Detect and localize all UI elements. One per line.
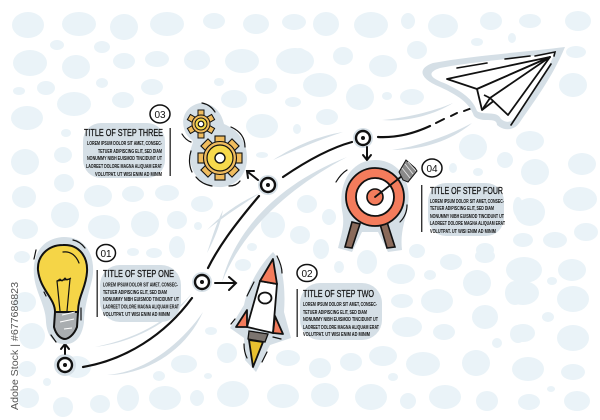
step 3 body: TETUER ADIPISCING ELIT, SED DIAM: [98, 149, 162, 155]
stock image credit: Adobe Stock | #677686823: [9, 282, 21, 410]
step 3 body: LAOREET DOLORE MAGNA ALIQUAM ERAT: [86, 164, 162, 170]
step 1 body: VOLUTPAT. UT WISI ENIM AD MINIM: [103, 312, 170, 318]
step 4 body: LOREM IPSUM DOLOR SIT AMET, CONSEC-: [430, 199, 504, 205]
step 1 body: TETUER ADIPISCING ELIT, SED DIAM: [103, 290, 167, 296]
step 2 text block: [296, 264, 382, 340]
step 3 body: NONUMMY NIBH EUISMOD TINCIDUNT UT: [87, 156, 162, 162]
step 1 body: NONUMMY NIBH EUISMOD TINCIDUNT UT: [103, 297, 179, 303]
step 4 number: 04: [426, 164, 438, 175]
step 2 body: [303, 302, 379, 338]
step 1 text block: [96, 244, 181, 322]
icon: paper plane: [423, 47, 565, 129]
step 1 title: TITLE OF STEP ONE: [103, 268, 174, 280]
arrow: node 2 to rocket: [215, 277, 236, 290]
route node 4: [356, 131, 370, 145]
step 3 title: TITLE OF STEP THREE: [84, 127, 163, 139]
step 2 body: LOREM IPSUM DOLOR SIT AMET, CONSEC-: [303, 302, 377, 308]
route node 1: [58, 358, 72, 372]
step 4 body: [430, 199, 505, 235]
route node 2: [195, 275, 209, 289]
arrow: node 3 to gears: [247, 171, 258, 180]
large gear: [198, 136, 242, 180]
step 2 body: LAOREET DOLORE MAGNA ALIQUAM ERAT: [303, 325, 379, 331]
main route line: [83, 108, 472, 367]
icon: target with arrow: [336, 160, 417, 252]
step 3 text block: [83, 105, 171, 178]
arrow: node 4 to target: [363, 147, 371, 160]
step 3 body: LOREM IPSUM DOLOR SIT AMET, CONSEC-: [87, 141, 162, 147]
step 4 body: LAOREET DOLORE MAGNA ALIQUAM ERAT: [430, 221, 505, 227]
step 3 body: VOLUTPAT. UT WISI ENIM AD MINIM: [95, 172, 162, 178]
icon: rocket: [230, 252, 291, 372]
step 3 number: 03: [154, 110, 166, 121]
step 4 title: TITLE OF STEP FOUR: [430, 185, 503, 197]
step 3 body: [86, 141, 162, 178]
step 2 body: NONUMMY NIBH EUISMOD TINCIDUNT UT: [303, 317, 378, 323]
step 2 body: TETUER ADIPISCING ELIT, SED DIAM: [303, 310, 367, 316]
step 1 number: 01: [100, 249, 112, 260]
step 2 number: 02: [301, 269, 313, 280]
step 4 body: TETUER ADIPISCING ELIT, SED DIAM: [430, 206, 494, 212]
step 2 title: TITLE OF STEP TWO: [303, 288, 374, 300]
small gear: [187, 110, 215, 138]
curved path motion streaks: [54, 103, 472, 376]
step 4 body: VOLUTPAT. UT WISI ENIM AD MINIM: [430, 229, 496, 235]
icon: light bulb: [34, 237, 93, 344]
step 1 body: LOREM IPSUM DOLOR SIT AMET, CONSEC-: [103, 282, 178, 288]
route node 3: [261, 178, 275, 192]
step 1 body: LAOREET DOLORE MAGNA ALIQUAM ERAT: [103, 304, 179, 310]
icon: gears: [182, 103, 247, 187]
step 2 body: VOLUTPAT. UT WISI ENIM AD MINIM: [303, 332, 370, 338]
step 4 text block: [421, 159, 505, 236]
arrow: node 1 to bulb: [61, 344, 69, 354]
step 4 body: NONUMMY NIBH EUISMOD TINCIDUNT UT: [430, 214, 504, 220]
step 1 body: [103, 282, 179, 318]
